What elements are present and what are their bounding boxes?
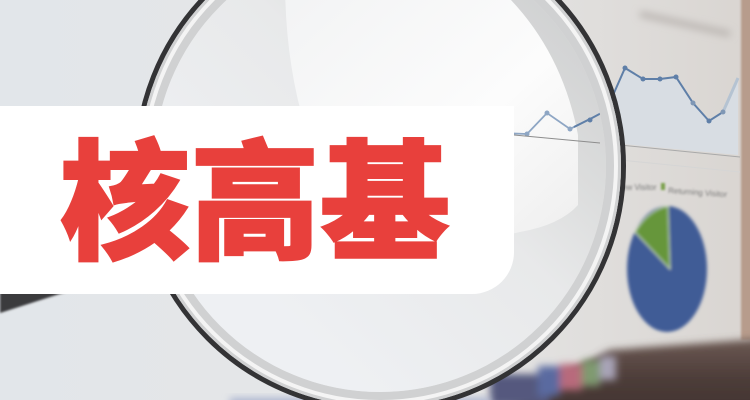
line chart area xyxy=(610,66,740,172)
magnifier handle xyxy=(0,286,72,313)
pie chart xyxy=(627,206,707,332)
lens interior xyxy=(162,0,604,392)
title panel xyxy=(0,106,514,294)
title: 核高基 xyxy=(60,131,450,277)
magnifier frame xyxy=(136,0,624,400)
bottom-left screen tint xyxy=(230,398,490,400)
legend text on screen: ew Visitor xyxy=(622,183,657,192)
screen right edge xyxy=(741,0,750,340)
lens highlight xyxy=(285,0,578,240)
legend text on screen: Returning Visitor xyxy=(668,186,728,199)
magnified line chart xyxy=(514,110,600,144)
blurred heading on screen xyxy=(640,14,730,34)
dock icons blurred xyxy=(490,356,616,400)
legend text on screen xyxy=(622,183,728,199)
bottom dark desk band xyxy=(480,336,750,400)
